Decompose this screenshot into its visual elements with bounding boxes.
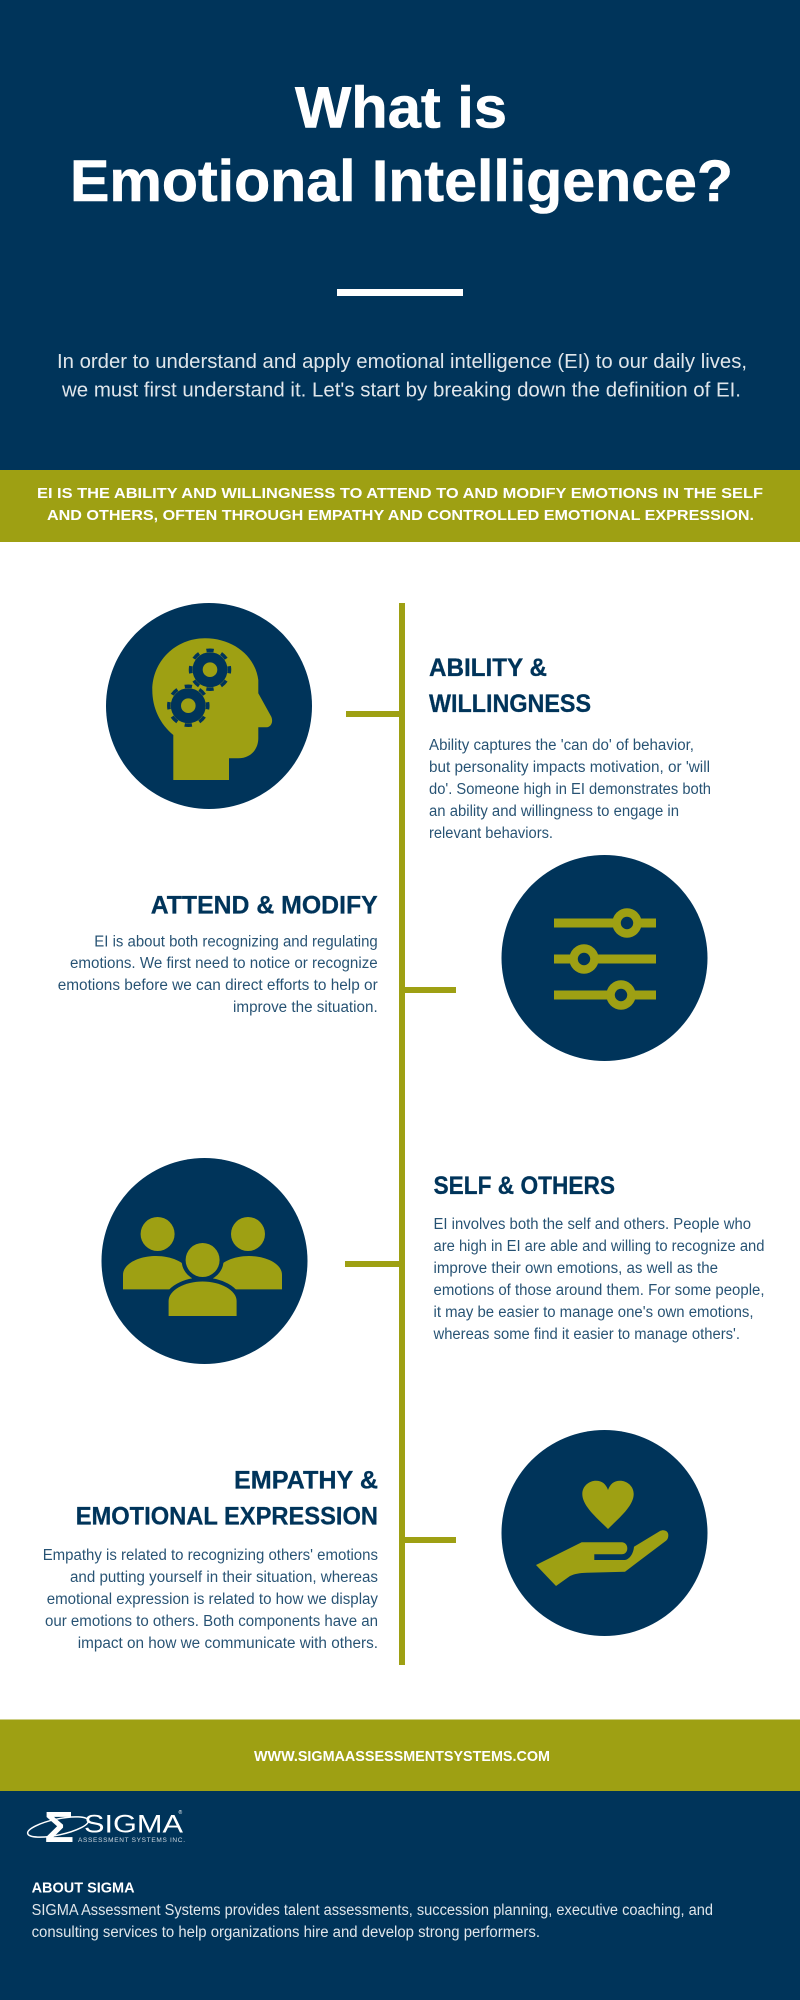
body: self and others: improve their own emotions, as well as the [434,1260,718,1277]
logo: sigma assessment systems [26,1803,185,1852]
panel: footer [0,1791,800,2000]
body: attend and modify: emotions before we can direct efforts to help or [58,977,378,994]
text block: attend and modify [58,892,378,1016]
heading: ability and willingness: ABILITY & [429,654,547,682]
body: empathy and emotional expression: Empathy is related to recognizing others' emotions [43,1547,378,1564]
body: ability and willingness: but personality impacts motivation, or 'will [429,759,710,776]
body: empathy and emotional expression: impact on how we communicate with others. [78,1635,378,1652]
body: empathy and emotional expression: emotional expression is related to how we display [47,1591,378,1608]
heading: empathy and emotional expression: EMOTIONAL EXPRESSION [76,1502,378,1530]
body: self and others [433,1216,764,1343]
icon: head with gears [106,603,312,809]
body: empathy and emotional expression [43,1547,378,1652]
website url: WWW.SIGMAASSESSMENTSYSTEMS.COM [254,1748,550,1765]
text block: self and others [433,1172,764,1343]
body: attend and modify [58,934,378,1016]
title: What is [295,76,507,140]
timeline with connector ticks [345,603,456,1665]
body: attend and modify: EI is about both recognizing and regulating [94,934,378,950]
body: ability and willingness: do'. Someone high in EI demonstrates both [429,781,711,798]
body: self and others: whereas some find it easier to manage others'. [433,1326,740,1343]
body: self and others: EI involves both the self and others. People who [434,1216,751,1233]
title [70,76,733,214]
panel: website band [0,1720,800,1791]
body: self and others: are high in EI are able and willing to recognize and [434,1238,764,1255]
body: ability and willingness [429,737,711,842]
intro paragraph: In order to understand and apply emotional intelligence (EI) to our daily lives, [57,351,747,373]
icon: heart over hand [502,1430,708,1636]
logo: sigma assessment systems: Σ [44,1803,74,1852]
icon: open hand [536,1530,668,1586]
about text [32,1902,713,1941]
text block: ability and willingness [429,654,711,842]
body: empathy and emotional expression: and putting yourself in their situation, whereas [70,1569,378,1586]
heading: empathy and emotional expression: EMPATHY & [234,1466,378,1494]
body: attend and modify: emotions. We first need to notice or recognize [70,955,378,972]
heading: ability and willingness: WILLINGNESS [429,690,591,718]
logo: sigma assessment systems: ASSESSMENT SYSTEMS INC. [78,1837,185,1844]
heading: empathy and emotional expression [76,1466,378,1530]
body: self and others: it may be easier to manage one's own emotions, [434,1304,754,1321]
intro paragraph: we must first understand it. Let's start by breaking down the definition of EI. [61,380,741,402]
panel: definition band [0,470,800,542]
heading: ability and willingness [429,654,591,718]
about text: consulting services to help organizations hire and develop strong performers. [32,1924,540,1941]
logo: sigma assessment systems: ® [178,1809,182,1816]
heading: self and others: SELF & OTHERS [434,1172,615,1200]
icon: heart [582,1481,634,1529]
body: ability and willingness: relevant behaviors. [429,825,553,842]
title underline bar [337,289,463,296]
definition text [37,485,763,524]
heading: attend and modify: ATTEND & MODIFY [151,892,378,920]
body: ability and willingness: an ability and willingness to engage in [429,803,679,820]
title: Emotional Intelligence? [70,149,733,214]
definition text: EI IS THE ABILITY AND WILLINGNESS TO ATTEND TO AND MODIFY EMOTIONS IN THE SELF [37,485,763,502]
definition text: AND OTHERS, OFTEN THROUGH EMPATHY AND CONTROLLED EMOTIONAL EXPRESSION. [47,507,754,524]
intro paragraph [57,351,747,402]
icon: sliders [502,855,708,1061]
heading: about sigma: ABOUT SIGMA [32,1880,135,1897]
text block: empathy and emotional expression [43,1466,378,1652]
about text: SIGMA Assessment Systems provides talent assessments, succession planning, executive coaching, and [32,1902,713,1919]
icon: group of people [102,1158,308,1364]
body: empathy and emotional expression: our emotions to others. Both components have an [45,1613,378,1630]
logo: sigma assessment systems: SIGMA [84,1811,183,1839]
body: attend and modify: improve the situation. [233,999,378,1016]
panel: header [0,0,800,470]
body: ability and willingness: Ability captures the 'can do' of behavior, [429,737,694,754]
body: self and others: emotions of those around them. For some people, [434,1282,764,1299]
